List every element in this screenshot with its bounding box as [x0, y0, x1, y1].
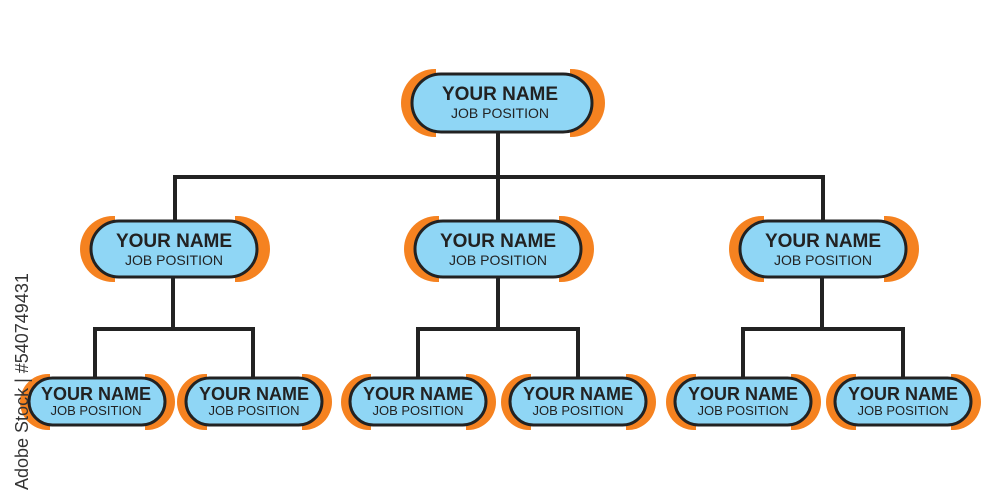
node: middle center: YOUR NAME [440, 231, 556, 252]
node: middle left: YOUR NAME [116, 231, 232, 252]
node: middle left [80, 213, 270, 285]
node: bottom 2: JOB POSITION [208, 403, 300, 418]
node: middle center: JOB POSITION [449, 252, 547, 268]
node: top: YOUR NAME [442, 84, 558, 105]
node: bottom 4 [501, 371, 656, 433]
node: bottom 6: YOUR NAME [848, 384, 958, 404]
node: middle right: JOB POSITION [774, 252, 872, 268]
node: middle right: YOUR NAME [765, 231, 881, 252]
node: bottom 6: JOB POSITION [857, 403, 949, 418]
node: bottom 2 [177, 371, 332, 433]
node: bottom 3 [341, 371, 496, 433]
node: middle right [729, 213, 919, 285]
node: bottom 4: YOUR NAME [523, 384, 633, 404]
watermark text: Adobe Stock | #540749431 [12, 273, 32, 490]
node: middle center [404, 213, 594, 285]
node: top [401, 66, 605, 140]
node: bottom 3: JOB POSITION [372, 403, 464, 418]
node: bottom 1: YOUR NAME [41, 384, 151, 404]
node: bottom 6 [826, 371, 981, 433]
node: bottom 4: JOB POSITION [532, 403, 624, 418]
node: bottom 5: JOB POSITION [697, 403, 789, 418]
node: bottom 1: JOB POSITION [50, 403, 142, 418]
node: bottom 1 [20, 371, 175, 433]
node: bottom 5 [666, 371, 821, 433]
node: top: JOB POSITION [451, 105, 549, 121]
node: middle left: JOB POSITION [125, 252, 223, 268]
node: bottom 3: YOUR NAME [363, 384, 473, 404]
node: bottom 2: YOUR NAME [199, 384, 309, 404]
connector lines [95, 133, 903, 378]
node: bottom 5: YOUR NAME [688, 384, 798, 404]
